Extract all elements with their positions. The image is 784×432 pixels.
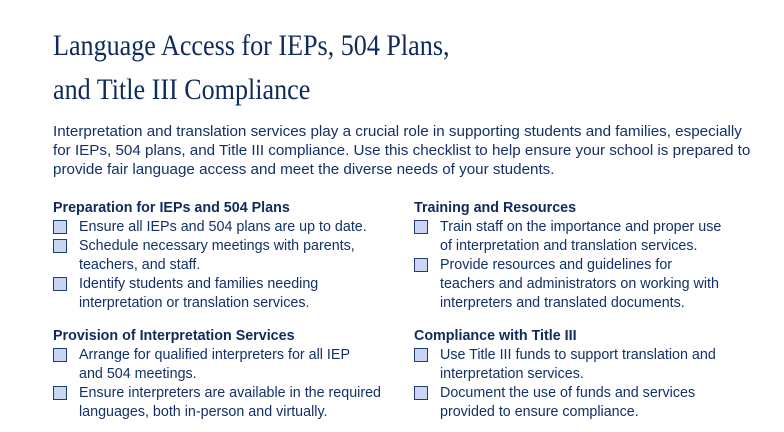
panel: preparation xyxy=(53,200,367,311)
panel: title III: Document the use of funds and services xyxy=(440,385,695,401)
panel: preparation: Schedule necessary meetings with parents, xyxy=(79,238,355,254)
panel: title III: Use Title III funds to support translation and xyxy=(440,347,716,363)
intro paragraph xyxy=(53,123,750,178)
panel: preparation: Ensure all IEPs and 504 plans are up to date. xyxy=(79,219,367,235)
panel: preparation: interpretation or translation services. xyxy=(79,295,309,311)
panel: title III: Compliance with Title III xyxy=(414,328,577,344)
panel: interpretation services: Ensure interpreters are available in the required xyxy=(79,385,381,401)
intro paragraph: Interpretation and translation services play a crucial role in supporting students and families, especially xyxy=(53,123,742,140)
panel: training xyxy=(414,200,721,311)
title: and Title III Compliance xyxy=(53,73,310,106)
panel: title III: provided to ensure compliance. xyxy=(440,404,639,420)
panel: interpretation services xyxy=(53,328,381,420)
panel: title III: interpretation services. xyxy=(440,366,584,382)
panel: training: interpreters and translated documents. xyxy=(440,295,685,311)
panel: training: Training and Resources xyxy=(414,200,576,216)
panel: preparation: Identify students and families needing xyxy=(79,276,318,292)
panel: training: Provide resources and guidelines for xyxy=(440,257,672,273)
panel: interpretation services: languages, both in-person and virtually. xyxy=(79,404,328,420)
intro paragraph: provide fair language access and meet the diverse needs of your students. xyxy=(53,161,554,178)
panel: title III xyxy=(414,328,716,420)
panel: preparation: teachers, and staff. xyxy=(79,257,200,273)
panel: interpretation services: Provision of Interpretation Services xyxy=(53,328,295,344)
panel: training: of interpretation and translation services. xyxy=(440,238,697,254)
panel: training: teachers and administrators on working with xyxy=(440,276,719,292)
panel: interpretation services: and 504 meetings. xyxy=(79,366,197,382)
title: Language Access for IEPs, 504 Plans, xyxy=(53,29,450,62)
panel: preparation: Preparation for IEPs and 504 Plans xyxy=(53,200,290,216)
panel: training: Train staff on the importance and proper use xyxy=(440,219,721,235)
panel: interpretation services: Arrange for qualified interpreters for all IEP xyxy=(79,347,350,363)
title xyxy=(53,29,450,106)
intro paragraph: for IEPs, 504 plans, and Title III compliance. Use this checklist to help ensure your school is prepared to xyxy=(53,142,750,159)
